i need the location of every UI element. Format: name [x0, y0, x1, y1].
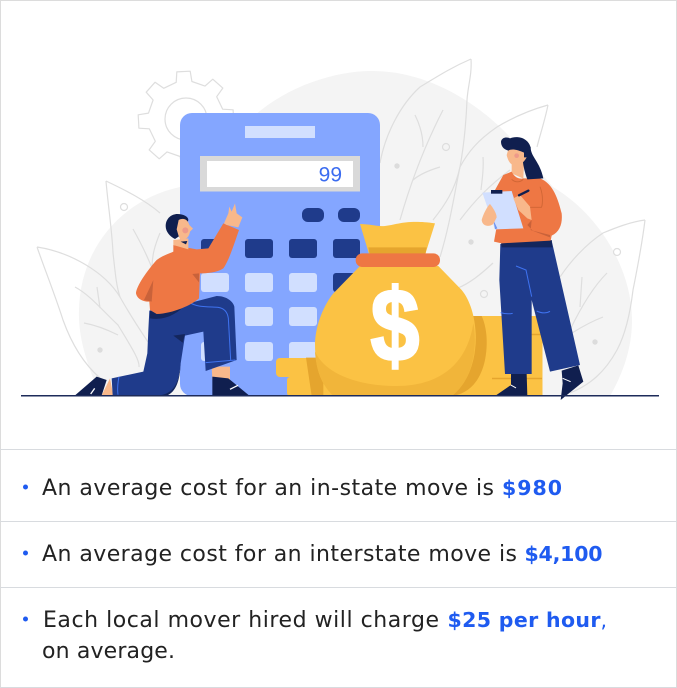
calculator display: 99 — [319, 164, 342, 186]
calculator keys — [201, 208, 360, 361]
fact: local mover: on average. — [42, 639, 175, 664]
icon: gear — [138, 71, 234, 167]
fact: local mover: $25 per hour — [448, 608, 601, 632]
fact: local mover — [23, 608, 607, 664]
fact: local mover: Each local mover hired will charge — [43, 608, 439, 633]
dollar sign: $ — [371, 269, 419, 384]
background leaves — [37, 59, 645, 393]
fact: interstate move: $4,100 — [524, 542, 602, 566]
man kneeling and pointing — [75, 203, 249, 395]
money bag — [306, 222, 487, 396]
woman with clipboard — [482, 137, 583, 400]
fact: local mover: , — [600, 608, 607, 632]
fact: in-state move: $980 — [502, 476, 562, 500]
fact: interstate move: An average cost for an interstate move is — [42, 542, 517, 567]
calculator — [180, 113, 380, 396]
fact: in-state move: An average cost for an in-state move is — [42, 476, 494, 501]
calculator display — [200, 156, 360, 192]
background blob — [79, 71, 632, 396]
fact list — [0, 450, 677, 688]
ground line — [21, 395, 659, 396]
gold coin stacks — [276, 316, 542, 396]
